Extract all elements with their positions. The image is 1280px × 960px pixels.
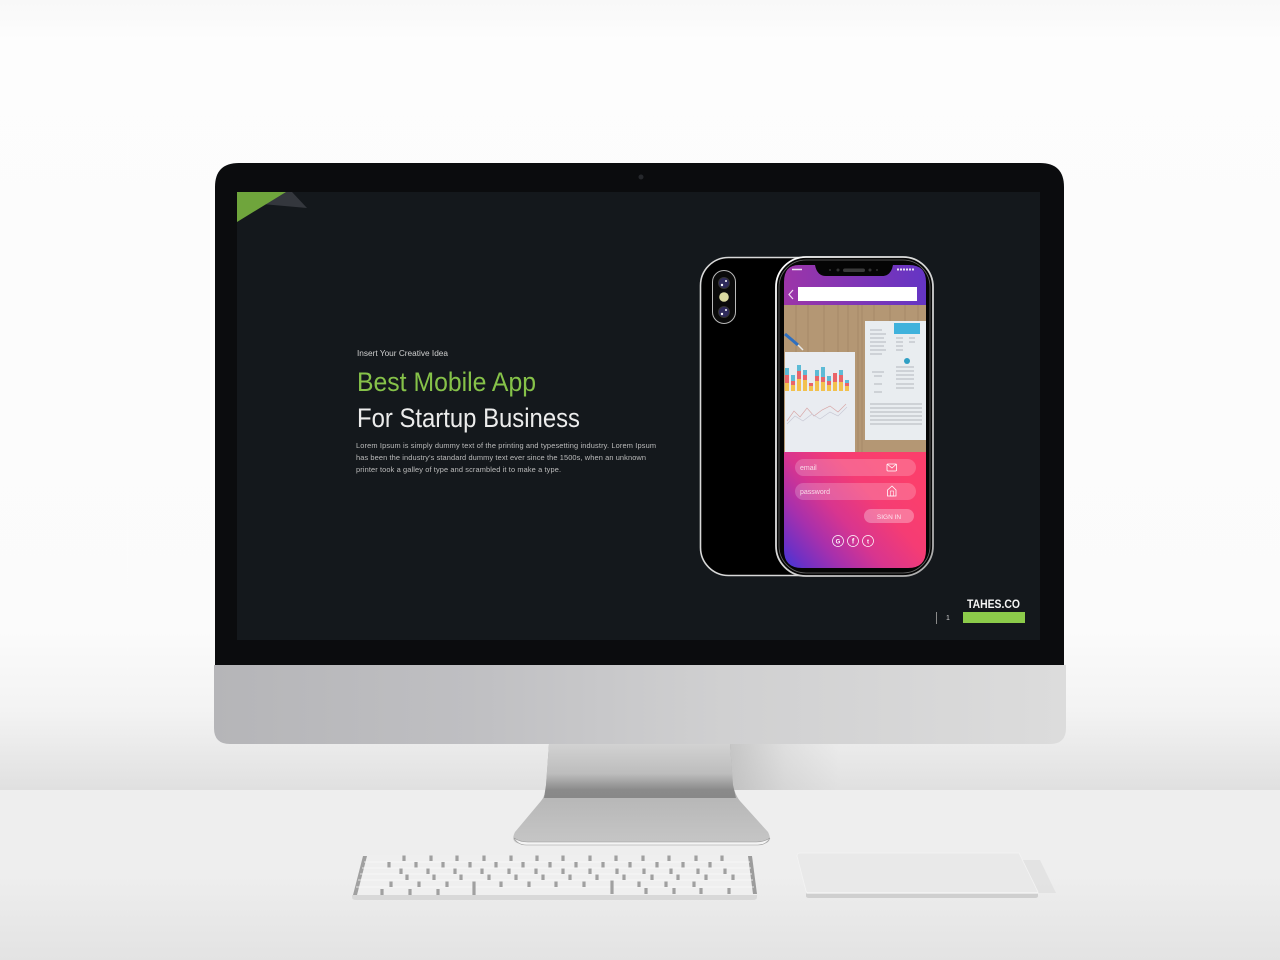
stacked bars	[785, 365, 849, 391]
title green line: Best Mobile App	[357, 367, 536, 397]
social icons: f	[852, 538, 855, 546]
title white line: For Startup Business	[357, 403, 580, 433]
blue box	[894, 323, 920, 334]
key row lines	[356, 862, 754, 887]
phone back	[700, 258, 830, 576]
social icons: G	[836, 540, 841, 546]
keyboard	[352, 855, 757, 900]
email field: email	[800, 465, 817, 472]
monitor chin	[214, 665, 1066, 744]
sign-in form	[784, 452, 926, 568]
corner decoration	[237, 192, 307, 222]
body paragraph	[356, 441, 656, 474]
chart paper	[785, 352, 855, 452]
pen	[785, 334, 798, 345]
email field	[795, 459, 916, 476]
sign in button: SIGN IN	[877, 514, 901, 521]
app header	[784, 265, 926, 305]
monitor body	[215, 163, 1064, 665]
page number: 1	[946, 615, 950, 622]
camera module	[712, 270, 736, 324]
small heading: Insert Your Creative Idea	[357, 349, 449, 358]
back arrow	[789, 290, 793, 299]
notch details	[792, 268, 915, 272]
trackpad	[797, 853, 1056, 898]
resume paper	[865, 321, 926, 440]
slide screen	[237, 192, 1040, 640]
app screen	[784, 265, 926, 568]
brand logo	[963, 599, 1025, 623]
body paragraph: has been the industry's standard dummy text ever since the 1500s, when an unknown	[356, 453, 646, 462]
password field: password	[800, 489, 830, 496]
password field	[795, 483, 916, 500]
page number	[936, 612, 950, 624]
webcam	[638, 174, 644, 180]
body paragraph: Lorem Ipsum is simply dummy text of the printing and typesetting industry. Lorem Ipsum	[356, 441, 656, 450]
monitor	[214, 163, 1066, 744]
line chart	[787, 404, 846, 421]
teal dot	[904, 358, 910, 364]
social icons: t	[867, 540, 869, 546]
search bar	[798, 287, 917, 301]
monitor stand	[513, 744, 770, 845]
desk photo	[784, 305, 926, 452]
brand logo: TAHES.CO	[967, 599, 1020, 611]
sign in button	[864, 509, 914, 523]
phone front	[776, 257, 933, 576]
key gaps	[382, 856, 733, 895]
body paragraph: printer took a galley of type and scrambled it to make a type.	[356, 465, 561, 474]
social icons	[832, 536, 874, 546]
